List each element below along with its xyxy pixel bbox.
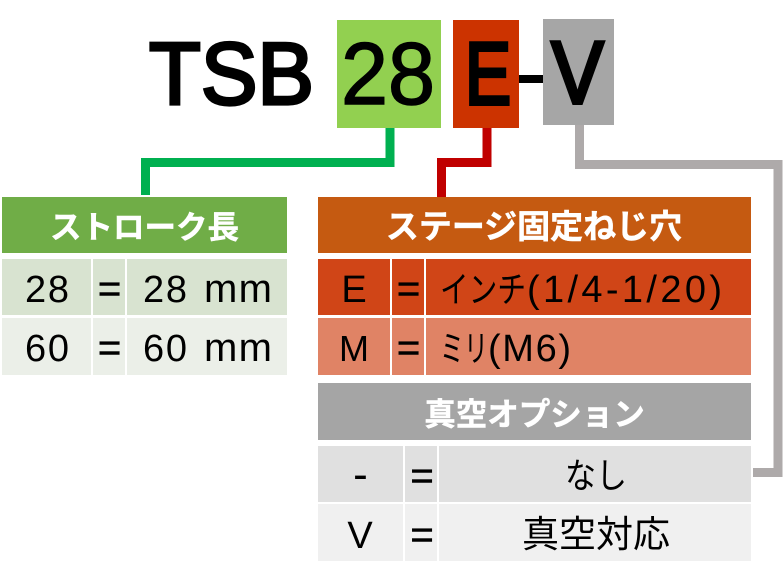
row: none: = (410, 454, 434, 498)
part code: mounting segment E: E (465, 24, 511, 123)
row: 60 (2, 318, 287, 375)
row: none (318, 446, 751, 502)
row: E inch: (1/4-1/20) (527, 269, 722, 311)
row: V vacuum (318, 504, 751, 561)
row: M metric: M (339, 328, 369, 369)
connector: V to vacuum table (580, 125, 778, 472)
row: V vacuum: V (347, 515, 373, 557)
row: M metric: (M6) (488, 328, 571, 370)
row: M metric: ミリ (440, 328, 488, 369)
header: vacuum option (318, 383, 751, 440)
header: stroke length (2, 197, 287, 253)
row: E inch: E (341, 269, 367, 311)
header: stage mounting hole: ステージ固定ねじ穴 (386, 208, 682, 245)
row: 60: 60 (143, 328, 187, 370)
row: none: - (353, 450, 368, 499)
row: E inch: インチ (440, 269, 526, 310)
row: 28: = (98, 267, 121, 311)
part code: stroke segment 28: 28 (341, 24, 435, 123)
row: 60: 60 (25, 328, 69, 370)
row: E inch: = (397, 267, 420, 311)
table: stroke length (2, 197, 287, 375)
table: vacuum option (318, 383, 751, 561)
connector: E to mounting table (442, 128, 487, 197)
header: stroke length: ストローク長 (50, 209, 239, 245)
row: V vacuum: 真空対応 (522, 514, 670, 555)
row: 60: mm (204, 326, 272, 370)
row: M metric: = (397, 326, 420, 370)
row: 28 (2, 259, 287, 315)
row: 28: 28 (143, 269, 187, 311)
part code: TSB prefix: TSB (149, 24, 314, 123)
connector: 28 to stroke table (146, 128, 390, 195)
part code: hyphen (519, 75, 543, 83)
row: V vacuum: = (410, 513, 434, 557)
row: 60: = (98, 326, 121, 370)
row: 28: 28 (25, 269, 69, 311)
row: M metric (318, 318, 751, 375)
row: none: なし (565, 457, 627, 496)
part code: vacuum segment V: V (552, 23, 604, 122)
header: stage mounting hole (318, 197, 751, 253)
header: vacuum option: 真空オプション (424, 396, 645, 432)
row: E inch (318, 259, 751, 315)
row: 28: mm (204, 267, 272, 311)
table: stage mounting hole (318, 197, 751, 375)
